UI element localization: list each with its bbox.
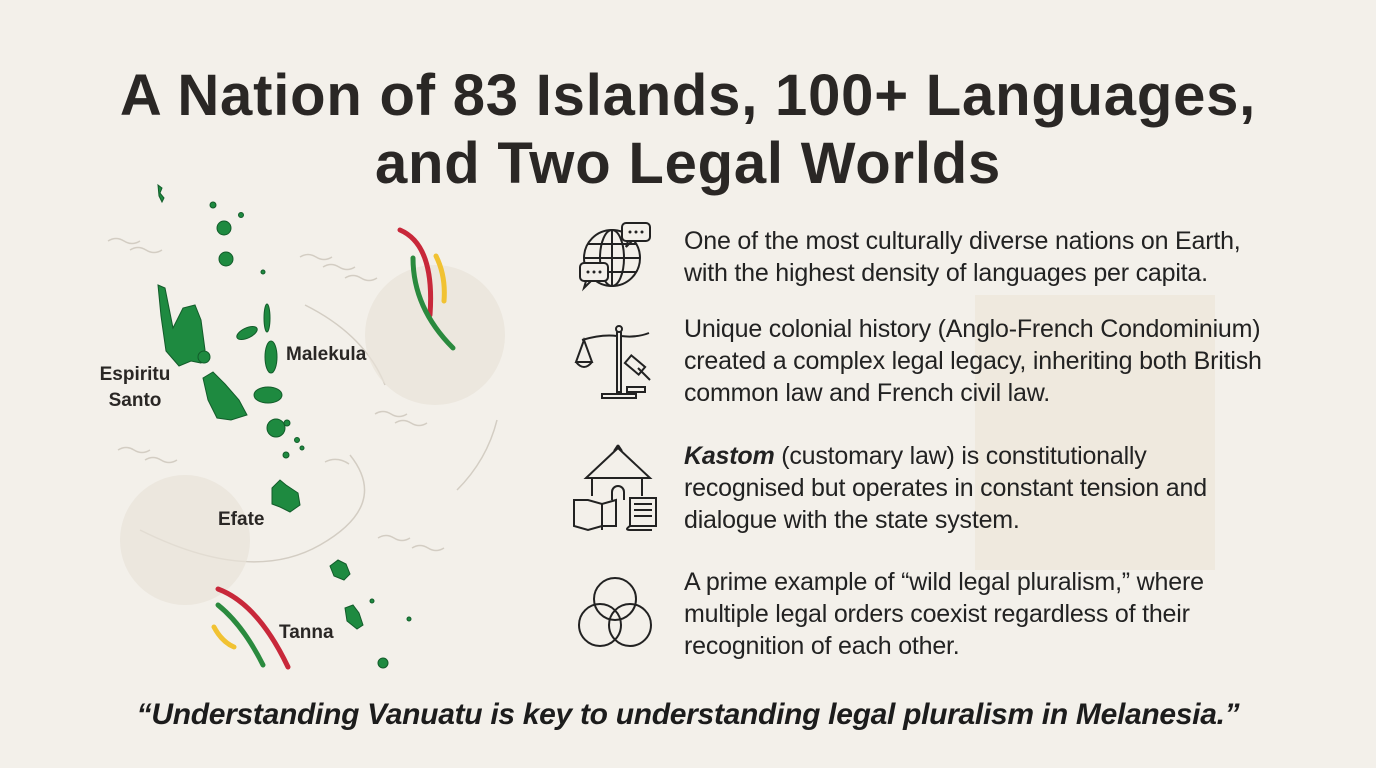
text: kastom <box>684 442 1207 534</box>
title: A Nation of 83 Islands, 100+ Languages, <box>120 63 1256 128</box>
text: legal pluralism: A prime example of “wild legal pluralism,” where <box>684 568 1204 596</box>
islands <box>158 185 411 668</box>
text: diversity <box>684 227 1241 287</box>
icon: globe with speech bubbles <box>579 222 651 292</box>
title <box>120 63 1256 196</box>
label: Espiritu Santo: Espiritu <box>100 364 170 385</box>
icon: overlapping circles <box>578 577 652 647</box>
label: Efate: Efate <box>218 509 264 530</box>
text: legal pluralism <box>684 568 1204 660</box>
text: kastom: recognised but operates in constant tension and <box>684 474 1207 502</box>
text: colonial history: created a complex legal legacy, inheriting both British <box>684 347 1262 375</box>
flag swoosh top <box>400 230 453 348</box>
quote: “Understanding Vanuatu is key to understanding legal pluralism in Melanesia.” <box>137 698 1239 731</box>
label: Espiritu Santo: Santo <box>109 390 161 411</box>
text: colonial history: common law and French civil law. <box>684 379 1050 407</box>
text: legal pluralism: recognition of each other. <box>684 632 960 660</box>
icon: hut, book, scroll <box>573 444 657 531</box>
text: colonial history: Unique colonial history (Anglo-French Condominium) <box>684 315 1260 343</box>
title: and Two Legal Worlds <box>375 131 1001 196</box>
text: kastom: dialogue with the state system. <box>684 506 1020 534</box>
parchment patch <box>975 295 1215 570</box>
label: Tanna: Tanna <box>279 622 334 643</box>
text: diversity: with the highest density of languages per capita. <box>684 259 1208 287</box>
icon: scales and gavel <box>574 325 651 399</box>
text: diversity: One of the most culturally diverse nations on Earth, <box>684 227 1241 255</box>
flag swoosh bottom <box>214 589 288 667</box>
label: Malekula: Malekula <box>286 344 366 365</box>
text: colonial history <box>684 315 1262 407</box>
text: kastom: Kastom (customary law) is constitutionally <box>684 442 1147 470</box>
text: legal pluralism: multiple legal orders coexist regardless of their <box>684 600 1190 628</box>
label: Espiritu Santo <box>100 364 170 411</box>
map of Vanuatu <box>108 184 505 670</box>
